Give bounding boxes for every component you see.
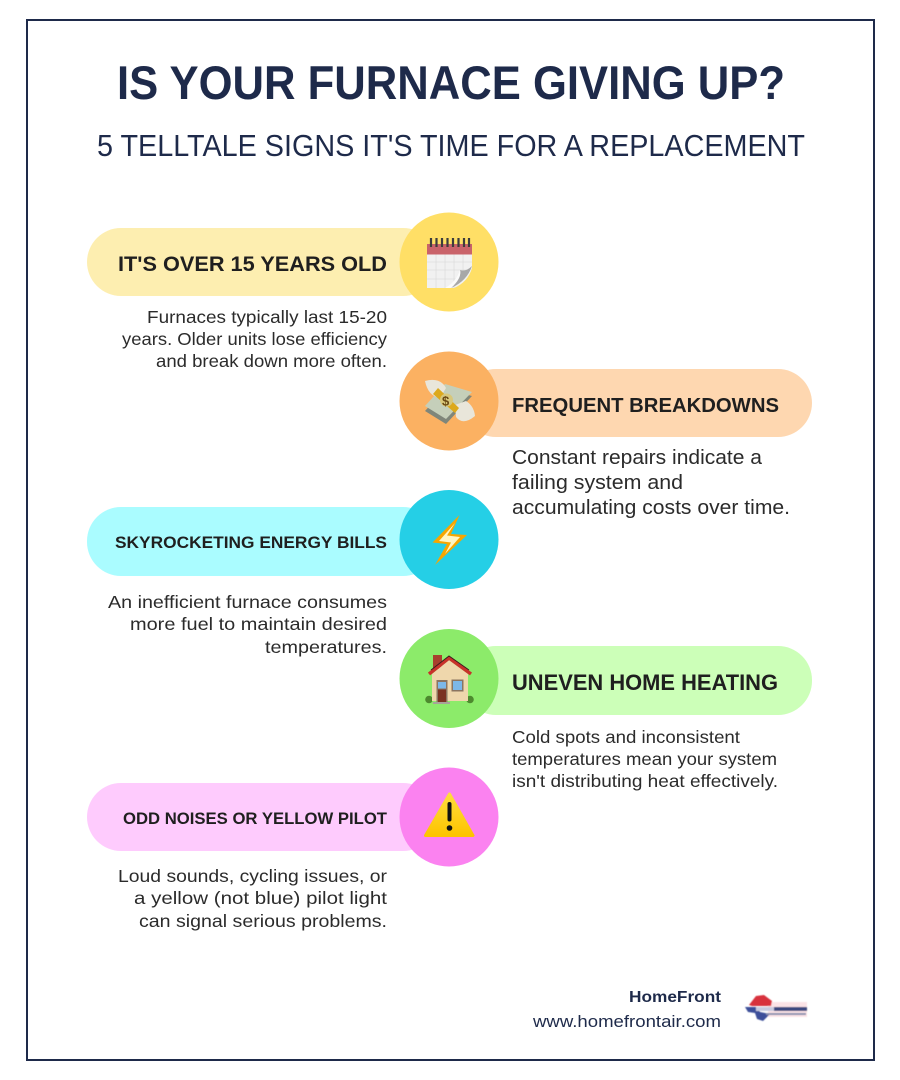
heading: energy bills: SKYROCKETING ENERGY BILLS [115,534,387,552]
icon circle: lightning [400,490,498,589]
description: uneven heating: Cold spots and inconsistent [512,727,740,747]
description: over 15 years [122,307,387,371]
heading: uneven heating: UNEVEN HOME HEATING [512,670,778,695]
panel: sign 5 [87,768,498,931]
pill: over 15 years [87,228,437,296]
icon: calendar [427,238,472,288]
description: energy bills: more fuel to maintain desired [130,614,387,634]
description: odd noises [118,866,387,931]
description: energy bills: temperatures. [265,637,387,657]
title: IS YOUR FURNACE GIVING UP? [117,56,785,109]
icon circle: warning [400,768,498,866]
heading: breakdowns: FREQUENT BREAKDOWNS [512,394,779,417]
description: odd noises: a yellow (not blue) pilot light [134,888,387,908]
icon: warning triangle [426,794,473,836]
description: over 15 years: years. Older units lose efficiency [122,329,387,349]
description: uneven heating [512,727,778,791]
description: energy bills: An inefficient furnace consumes [108,592,387,612]
panel: sign 3 [87,490,498,657]
description: uneven heating: temperatures mean your system [512,749,777,769]
brand name: HomeFront [629,989,721,1006]
panel: sign 1 [87,212,498,371]
description: odd noises: can signal serious problems. [139,911,387,931]
icon: flying money: $ [442,394,450,408]
pill: energy bills [87,507,437,576]
icon: flying money [425,380,475,424]
icon: house [425,655,474,704]
icon circle: money [400,352,498,450]
icon circle: house [400,629,498,728]
description: energy bills [108,592,387,657]
subtitle: 5 TELLTALE SIGNS IT'S TIME FOR A REPLACEMENT [97,128,805,163]
heading: over 15 years: IT'S OVER 15 YEARS OLD [118,252,387,276]
icon circle: calendar [400,212,498,312]
icon: lightning bolt [432,515,467,565]
description: over 15 years: and break down more often. [156,351,387,371]
pill: breakdowns [462,369,812,437]
description: breakdowns [512,447,790,519]
panel: sign 4 [400,629,812,791]
pill: odd noises [87,783,437,851]
pill: uneven heating [462,646,812,715]
description: breakdowns: Constant repairs indicate a [512,447,763,469]
description: over 15 years: Furnaces typically last 15-20 [147,307,387,327]
description: uneven heating: isn't distributing heat effectively. [512,771,778,791]
website: www.homefrontair.com [532,1013,721,1031]
heading: odd noises: ODD NOISES OR YELLOW PILOT [123,810,387,828]
description: breakdowns: failing system and [512,472,683,494]
panel: sign 2 [400,352,812,519]
logo [745,995,807,1021]
description: odd noises: Loud sounds, cycling issues, or [118,866,387,886]
footer: brand [532,989,807,1031]
description: breakdowns: accumulating costs over time. [512,497,790,519]
